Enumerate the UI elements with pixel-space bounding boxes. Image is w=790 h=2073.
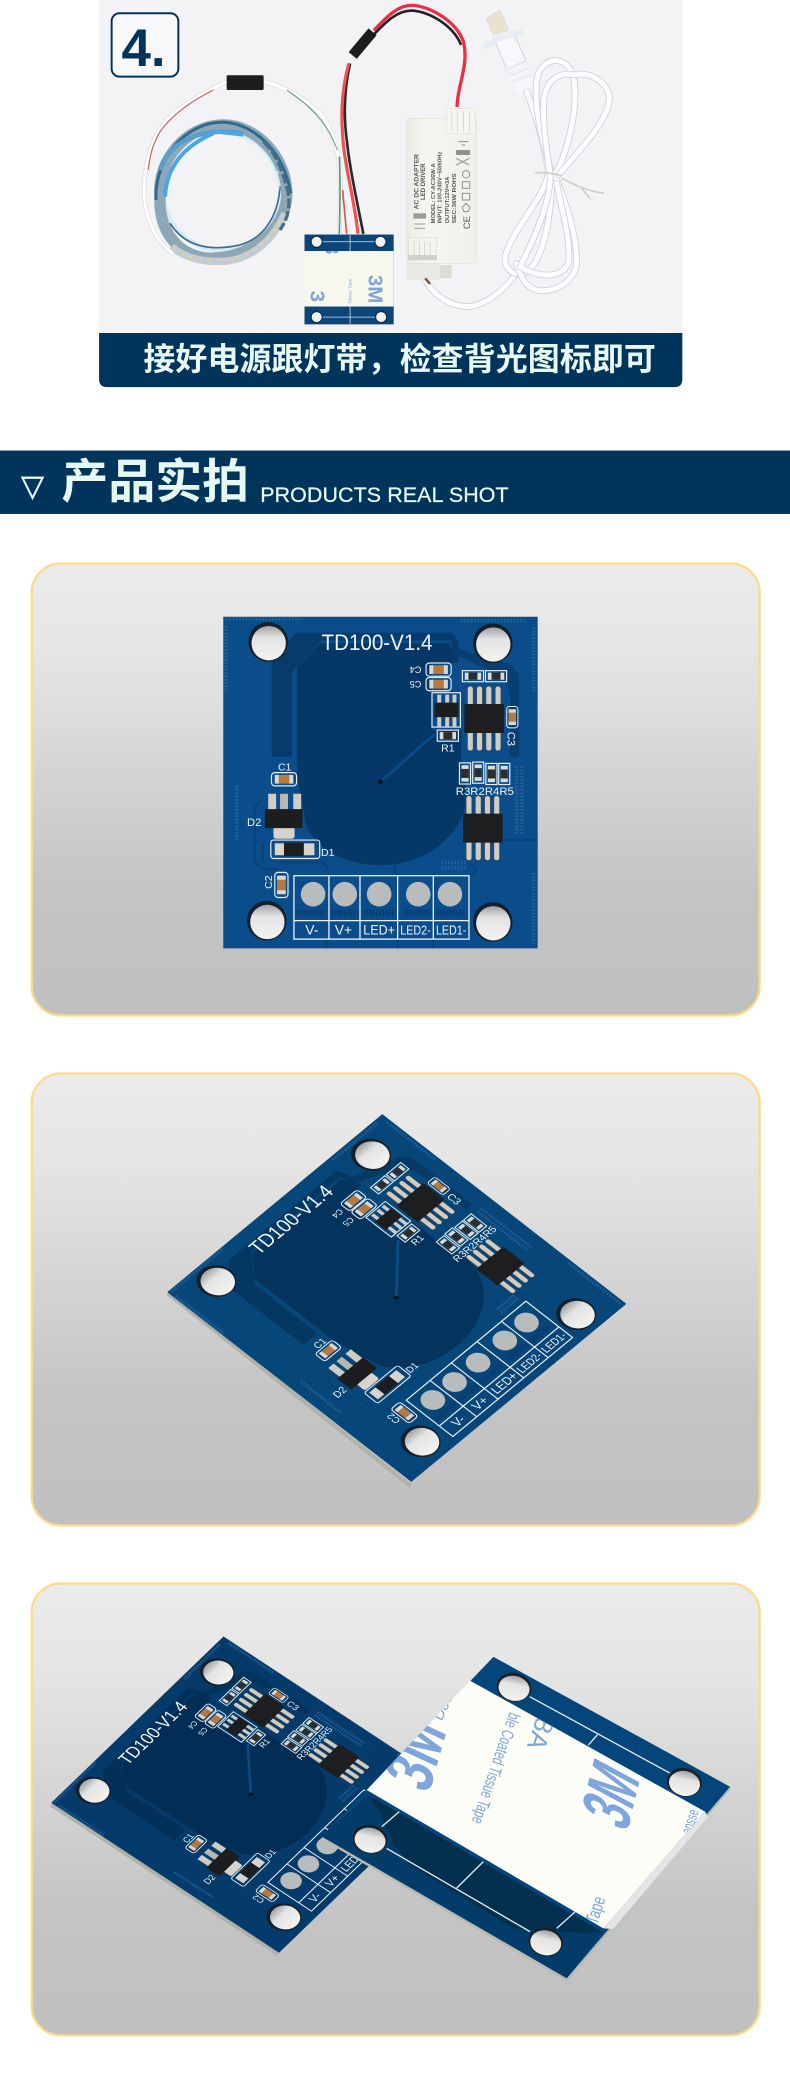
silkscreen labels: R3R2R4R5 <box>294 1725 335 1762</box>
silkscreen labels: C2 <box>250 1892 266 1905</box>
card background <box>32 564 760 1015</box>
circuit board, straight on <box>223 617 538 948</box>
card background <box>32 1073 760 1525</box>
AC adapter box: INPUT: 100-240V~50/60Hz <box>438 151 444 223</box>
silkscreen labels: D2 <box>331 1385 350 1400</box>
silkscreen labels: LED2- <box>515 1351 546 1376</box>
circuit board, back side with 3M tape <box>322 1657 730 1980</box>
board edge shadow <box>51 1805 278 1954</box>
AC adapter box: LED DRIVER <box>420 163 427 200</box>
silkscreen labels: R3R2R4R5 <box>456 786 514 798</box>
section header: products real shot <box>0 451 790 514</box>
tape print <box>386 1700 698 1922</box>
silkscreen labels: C5 <box>196 1726 210 1737</box>
step 4 photo panel <box>99 0 682 334</box>
silkscreen labels: D1 <box>262 1847 278 1860</box>
silkscreen labels: R1 <box>256 1737 273 1750</box>
silkscreen labels: D2 <box>201 1873 218 1886</box>
sticker print: 3M <box>364 275 387 303</box>
tape print: ansse <box>679 1807 703 1837</box>
silkscreen labels: LED+ <box>338 1850 366 1874</box>
silkscreen labels: C3 <box>444 1192 463 1207</box>
silkscreen labels <box>193 1134 604 1462</box>
silkscreen labels: C2 <box>385 1411 403 1425</box>
AC adapter box: MODEL: CY-AC36W-A <box>431 163 437 223</box>
silkscreen labels: C5 <box>340 1215 356 1229</box>
AC adapter box: SEC:36W ROHS <box>452 173 458 223</box>
section header: products real shot: PRODUCTS REAL SHOT <box>260 483 509 507</box>
panel: board front and adhesive back <box>32 1583 760 2035</box>
silkscreen labels: LED+ <box>488 1370 521 1397</box>
panel: board front view <box>32 564 760 1015</box>
LED strip coil <box>156 122 291 261</box>
silkscreen labels: LED+ <box>363 922 395 938</box>
silkscreen labels: R1 <box>409 1233 427 1248</box>
step number badge <box>112 13 178 78</box>
small board with adhesive backing <box>305 235 394 324</box>
sticker print: 3 <box>320 243 343 254</box>
white mains cord and plug <box>425 10 609 307</box>
silkscreen labels: V- <box>307 1891 324 1905</box>
silkscreen labels: R1 <box>441 743 455 755</box>
silkscreen labels: V+ <box>323 1873 343 1889</box>
silkscreen labels: D2 <box>247 817 261 829</box>
silkscreen labels: C1 <box>180 1832 196 1845</box>
silkscreen labels <box>73 1653 433 1936</box>
silkscreen labels: D1 <box>321 847 335 859</box>
red and black power wire with connector <box>342 5 465 234</box>
silkscreen labels: LED1- <box>539 1331 570 1355</box>
AC adapter box <box>407 108 477 280</box>
strip lead wires and connector <box>144 75 347 253</box>
AC adapter box: AC DC ADAPTER <box>413 154 420 209</box>
silkscreen labels: C1 <box>311 1337 330 1351</box>
sticker print: Tissue Tape <box>347 278 353 304</box>
silkscreen labels: TD100-V1.4 <box>244 1181 339 1259</box>
sticker print: 3 <box>305 291 328 302</box>
AC adapter box: OUTPUT:12V⎓3A <box>445 177 451 223</box>
silkscreen labels: V- <box>448 1413 469 1429</box>
board edge shadow <box>168 1293 411 1486</box>
sticker print <box>310 251 382 304</box>
panel: board angled view <box>32 1073 760 1525</box>
silkscreen labels: C4 <box>329 1207 346 1220</box>
silkscreen labels: LED2- <box>400 924 431 938</box>
silkscreen labels: TD100-V1.4 <box>114 1698 192 1768</box>
tape print: Double <box>430 1672 466 1723</box>
step 4 caption bar: 接好电源跟灯带，检查背光图标即可 <box>143 341 656 377</box>
tape print: 3M <box>370 1704 461 1801</box>
silkscreen labels: LED1- <box>436 924 466 938</box>
tape print: 3M <box>567 1748 654 1841</box>
step number badge: 4. <box>122 19 166 78</box>
silkscreen labels: V- <box>305 922 318 938</box>
silkscreen labels: C3 <box>504 732 516 746</box>
AC adapter box: CE <box>462 216 472 229</box>
section header: products real shot: 产品实拍 <box>61 456 249 508</box>
tape print: 8A <box>521 1714 560 1754</box>
silkscreen labels: R3R2R4R5 <box>451 1224 500 1264</box>
silkscreen labels: C4 <box>410 664 421 674</box>
step 4 caption bar <box>99 333 682 387</box>
silkscreen labels: D1 <box>404 1361 422 1375</box>
circuit board, rotated <box>167 1114 626 1482</box>
section header: products real shot: ▽ <box>21 469 44 504</box>
silkscreen labels: C5 <box>410 679 421 689</box>
circuit board, front side <box>51 1636 451 1953</box>
tape print: ble Coated Tissue Tape <box>468 1710 525 1827</box>
silkscreen labels: C2 <box>263 875 275 889</box>
silkscreen labels: V+ <box>335 922 352 938</box>
card background <box>32 1583 760 2035</box>
silkscreen labels: V+ <box>468 1394 492 1413</box>
silkscreen labels <box>247 630 516 938</box>
silkscreen labels: C3 <box>284 1699 301 1712</box>
tape print: Tape <box>581 1894 609 1926</box>
photo background <box>99 0 682 334</box>
silkscreen labels: TD100-V1.4 <box>322 630 433 655</box>
silkscreen labels: C1 <box>278 762 292 774</box>
silkscreen labels: C4 <box>186 1719 200 1731</box>
